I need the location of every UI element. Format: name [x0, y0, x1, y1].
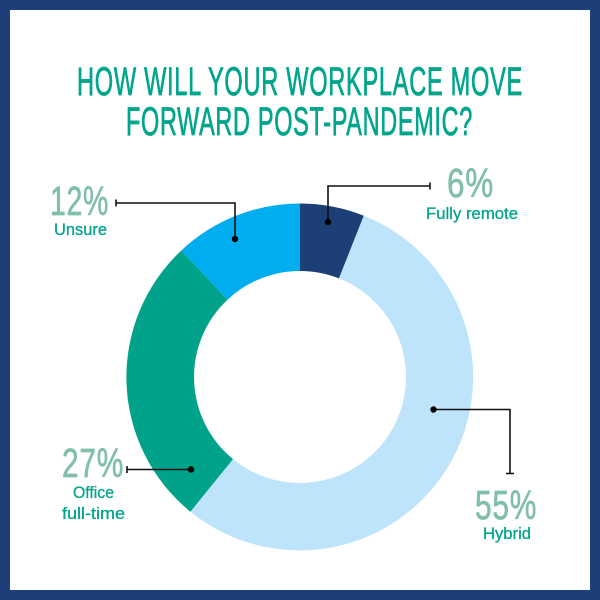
office marker	[188, 466, 194, 473]
callout: fully remote	[325, 160, 518, 225]
fully remote marker	[325, 219, 331, 225]
office leader line	[127, 466, 191, 473]
office label	[62, 483, 125, 523]
title	[77, 60, 523, 144]
segment: hybrid 55%	[190, 216, 473, 550]
fully remote label: Fully remote	[426, 204, 518, 223]
segment: unsure 12%	[181, 204, 300, 300]
unsure marker	[232, 236, 238, 242]
hybrid label: Hybrid	[483, 524, 531, 543]
fully remote leader line	[328, 182, 430, 222]
hybrid marker	[430, 406, 437, 413]
unsure leader line	[116, 200, 235, 239]
fully remote value: 6%	[447, 160, 494, 206]
callout: office full-time	[62, 440, 194, 523]
unsure value: 12%	[50, 178, 109, 224]
donut chart	[126, 204, 473, 550]
hybrid value: 55%	[475, 482, 537, 528]
segment: fully remote 6%	[300, 204, 364, 278]
office label: full-time	[62, 504, 125, 523]
unsure label: Unsure	[54, 220, 107, 239]
office value: 27%	[62, 440, 124, 486]
callout: hybrid	[430, 406, 537, 543]
segment: office full-time 27%	[126, 250, 233, 512]
callout: unsure	[50, 178, 238, 242]
office label: Office	[73, 483, 114, 502]
hybrid leader line	[433, 410, 514, 474]
